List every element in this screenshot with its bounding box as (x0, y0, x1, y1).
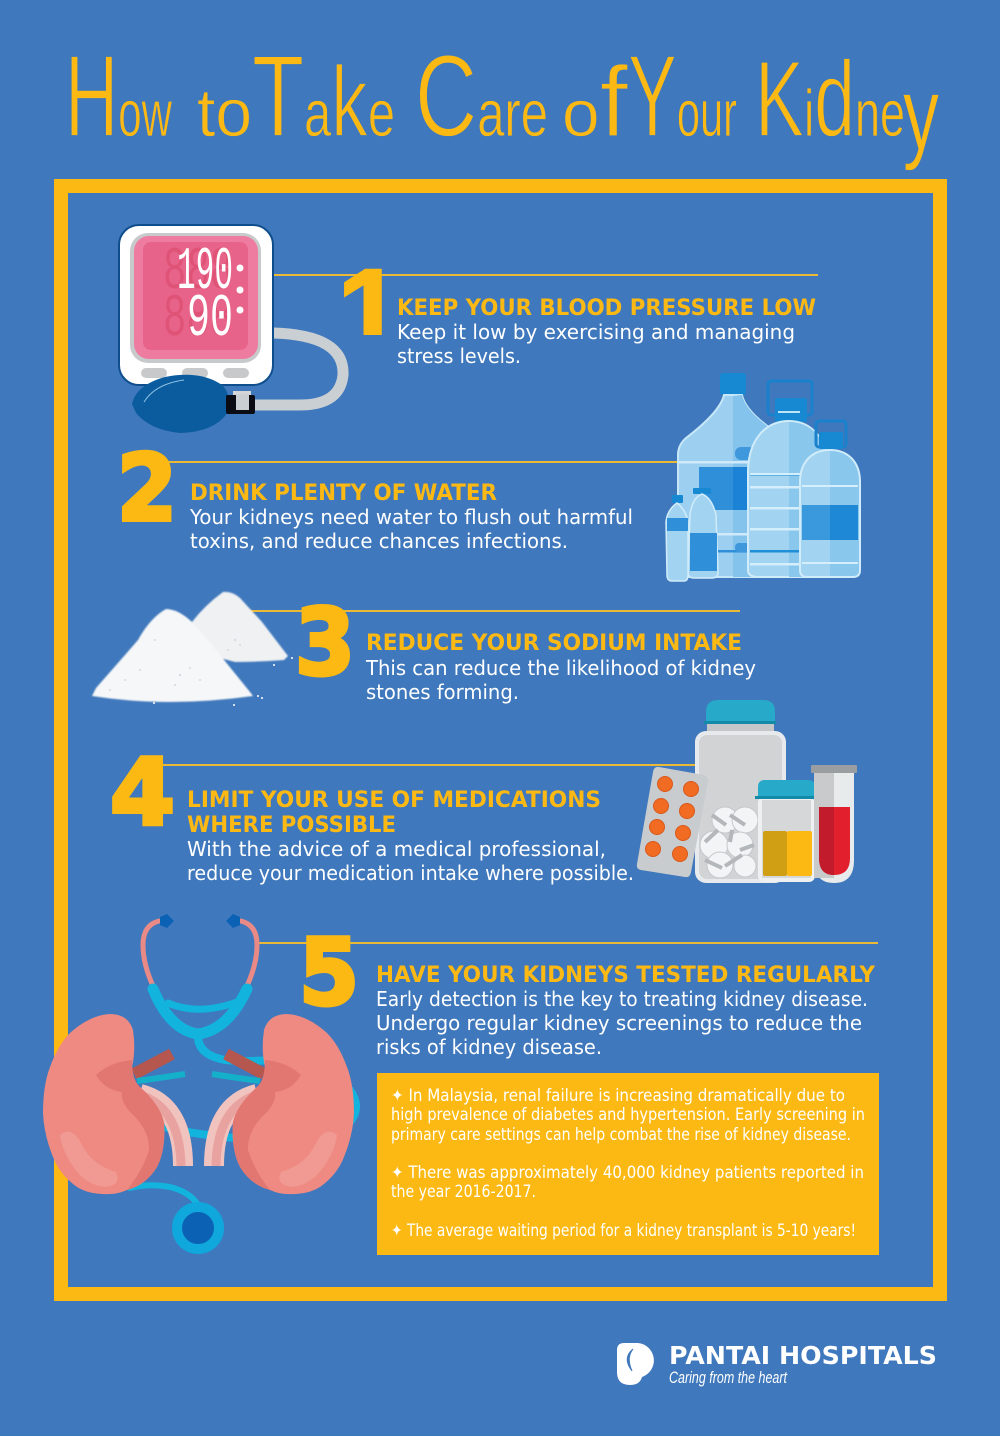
step 5 text: Early detection is the key to treating kidney disease. (376, 987, 868, 1011)
step 3 text: REDUCE YOUR SODIUM INTAKE (366, 630, 742, 656)
step 5 text: risks of kidney disease. (376, 1035, 602, 1059)
step 2 number: 2 (117, 435, 177, 542)
yellow frame (61, 186, 940, 1294)
step 1 text: stress levels. (397, 344, 521, 368)
title: Take (252, 31, 395, 161)
step 5 text: HAVE YOUR KIDNEYS TESTED REGULARLY (376, 962, 876, 988)
callout: kidney facts (377, 1073, 879, 1255)
step 4 number: 4 (110, 739, 175, 846)
title: How (65, 31, 172, 161)
step 2 text: DRINK PLENTY OF WATER (190, 480, 497, 506)
title: Your (628, 31, 737, 161)
icon: blood pressure monitor: 90 (187, 286, 233, 354)
step 1 text (397, 295, 816, 368)
step 1 text: KEEP YOUR BLOOD PRESSURE LOW (397, 295, 816, 321)
step 2 text (189, 480, 633, 553)
step 1 text: Keep it low by exercising and managing (397, 320, 795, 344)
callout: kidney facts: ✦ In Malaysia, renal failure is increasing dramatically due to (391, 1086, 845, 1105)
connector line: step 3 (250, 610, 740, 612)
step 2 text: toxins, and reduce chances infections. (190, 529, 568, 553)
title: y (903, 56, 939, 171)
step 4 text: With the advice of a medical professional, (187, 837, 606, 861)
step 3 number: 3 (295, 589, 355, 696)
step 4 text: WHERE POSSIBLE (187, 812, 396, 838)
connector line: step 1 (273, 274, 818, 276)
step 3 text: stones forming. (366, 680, 519, 704)
step 5 number: 5 (299, 919, 359, 1026)
icon: blood pressure monitor: 888 (163, 286, 233, 354)
icon: kidneys and stethoscope (43, 914, 356, 1249)
title: Kidne (755, 38, 905, 159)
title: Care (415, 31, 548, 161)
callout: kidney facts: ✦ There was approximately 40,000 kidney patients reported in (391, 1163, 864, 1182)
step 4 text: LIMIT YOUR USE OF MEDICATIONS (187, 787, 601, 813)
step 2 text: Your kidneys need water to flush out harmful (189, 505, 633, 529)
callout: kidney facts: the year 2016-2017. (391, 1182, 536, 1201)
step 5 text: Undergo regular kidney screenings to reduce the (376, 1011, 862, 1035)
step 1 number: 1 (337, 245, 403, 377)
icon: blood pressure monitor (119, 225, 343, 433)
connector line: step 5 (256, 942, 878, 944)
title: to (197, 75, 252, 151)
icon: blood pressure monitor: 888 (163, 239, 233, 307)
callout: kidney facts: high prevalence of diabetes and hypertension. Early screening in (391, 1105, 865, 1124)
icon: water bottles (666, 373, 860, 581)
callout: kidney facts: ✦ The average waiting period for a kidney transplant is 5-10 years! (391, 1221, 856, 1240)
icon: salt piles (92, 592, 293, 706)
step 4 text: reduce your medication intake where possible. (187, 861, 634, 885)
icon: medication and test samples (637, 700, 857, 883)
title: of (562, 46, 628, 158)
step 3 text (365, 630, 756, 704)
step 5 text (376, 962, 876, 1059)
logo: Pantai Hospitals: Caring from the heart (669, 1368, 788, 1387)
icon: blood pressure monitor: 190 (177, 239, 233, 307)
step 3 text: This can reduce the likelihood of kidney (365, 656, 756, 680)
callout: kidney facts: primary care settings can help combat the rise of kidney disease. (391, 1125, 851, 1144)
logo: Pantai Hospitals: PANTAI HOSPITALS (669, 1341, 937, 1370)
connector line: step 4 (160, 764, 697, 766)
step 4 text (187, 787, 634, 885)
title (65, 31, 939, 171)
connector line: step 2 (165, 461, 682, 463)
logo: Pantai Hospitals (617, 1341, 937, 1387)
